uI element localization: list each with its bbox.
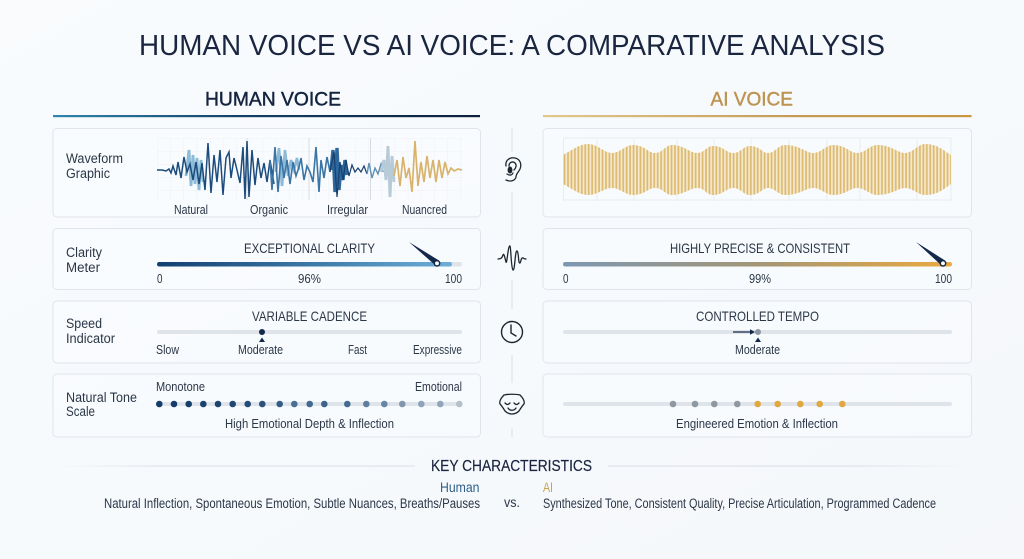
speed track and marker — [157, 329, 462, 342]
waveform captions: Natural — [174, 202, 208, 217]
label: clarity meter — [66, 245, 102, 275]
heading: key characteristics: KEY CHARACTERISTICS — [431, 458, 592, 475]
waveform captions: Nuancred — [402, 202, 447, 217]
label: waveform graphic: Waveform — [66, 151, 123, 166]
panel: AI clarity meter — [543, 228, 972, 290]
icon: sound wave — [498, 246, 526, 270]
clarity scale labels: 100 — [935, 271, 952, 286]
tone dots — [563, 401, 952, 407]
icon: clock — [502, 322, 522, 342]
label: clarity meter: Clarity — [66, 245, 102, 260]
heading: AI voice: AI VOICE — [710, 88, 793, 110]
label: natural tone scale: Scale — [66, 404, 95, 419]
heading: variable cadence: VARIABLE CADENCE — [252, 308, 367, 324]
speed labels: Slow — [156, 342, 179, 357]
icon: face — [500, 394, 524, 414]
clarity scale labels: 100 — [445, 271, 462, 286]
label: speed indicator: Indicator — [66, 331, 115, 346]
title: HUMAN VOICE VS AI VOICE: A COMPARATIVE ANALYSIS — [139, 30, 885, 62]
tone scale end labels: Monotone — [156, 379, 205, 394]
AI characteristics — [543, 480, 936, 511]
speed labels: Expressive — [413, 342, 462, 357]
heading: highly precise and consistent: HIGHLY PRECISE & CONSISTENT — [670, 240, 850, 256]
clarity scale labels: 0 — [157, 271, 162, 286]
tone caption: Engineered Emotion & Inflection — [676, 416, 838, 431]
AI characteristics: Synthesized Tone, Consistent Quality, Precise Articulation, Programmed Cadence — [543, 496, 936, 511]
tone scale end labels — [156, 379, 462, 394]
icon: ear — [506, 158, 521, 181]
human characteristics: Natural Inflection, Spontaneous Emotion, Subtle Nuances, Breaths/Pauses — [104, 496, 480, 511]
panel: AI tone scale — [543, 374, 972, 437]
panel: AI speed indicator — [543, 301, 972, 363]
label: speed indicator — [66, 316, 115, 346]
waveform captions — [174, 202, 447, 217]
gauge needle — [916, 242, 946, 266]
clarity bar 99% — [563, 262, 952, 266]
label: natural tone scale: Natural Tone — [66, 390, 137, 405]
tone caption: High Emotional Depth & Inflection — [225, 416, 394, 431]
waveform captions: Irregular — [327, 202, 369, 217]
gauge needle — [409, 242, 440, 266]
clarity scale labels: 99% — [749, 271, 771, 286]
versus label: vs. — [504, 495, 520, 510]
AI characteristics: AI — [543, 480, 553, 495]
speed label: Moderate — [735, 342, 780, 357]
label: clarity meter: Meter — [66, 260, 100, 275]
clarity bar 96% — [157, 262, 462, 266]
panel: human natural tone scale — [53, 374, 480, 437]
tone dots — [156, 401, 463, 407]
clarity scale labels: 0 — [563, 271, 568, 286]
human characteristics: Human — [440, 480, 480, 495]
panel: human waveform — [53, 128, 480, 217]
panel: human clarity meter — [53, 228, 480, 290]
waveform captions: Organic — [250, 202, 288, 217]
speed labels: Moderate — [238, 342, 283, 357]
chart: human waveform — [157, 138, 462, 200]
human characteristics — [104, 480, 480, 511]
heading: controlled tempo: CONTROLLED TEMPO — [696, 308, 819, 324]
panel: human speed indicator — [53, 301, 480, 363]
clarity scale labels — [563, 271, 952, 286]
speed track, arrow and marker — [563, 329, 952, 342]
section: key characteristics — [53, 458, 971, 511]
label: speed indicator: Speed — [66, 316, 102, 331]
speed labels: Fast — [348, 342, 367, 357]
clarity scale labels — [157, 271, 462, 286]
tone scale end labels: Emotional — [415, 379, 462, 394]
chart: AI waveform — [563, 138, 951, 201]
panel: AI waveform — [543, 128, 972, 217]
heading: human voice: HUMAN VOICE — [205, 88, 341, 110]
speed labels — [156, 342, 462, 357]
label: waveform graphic — [66, 151, 123, 181]
clarity scale labels: 96% — [298, 271, 321, 286]
label: natural tone scale — [66, 390, 137, 419]
label: waveform graphic: Graphic — [66, 166, 110, 181]
heading: exceptional clarity: EXCEPTIONAL CLARITY — [244, 240, 376, 256]
